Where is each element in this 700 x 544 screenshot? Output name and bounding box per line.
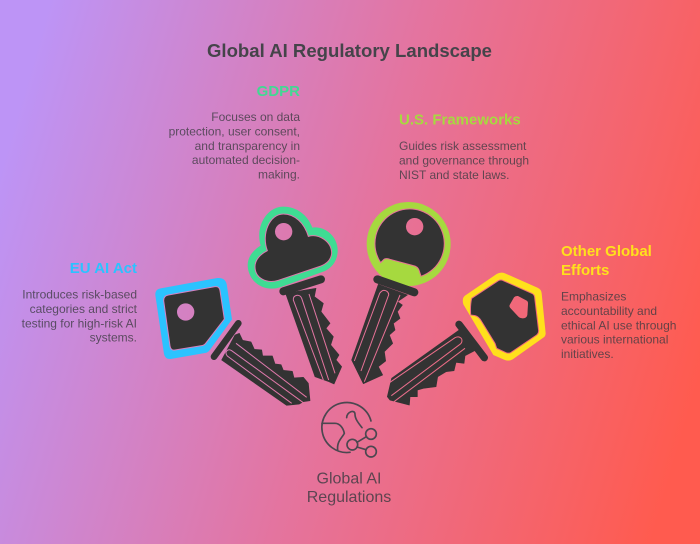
panel: U.S. Frameworks text — [399, 112, 529, 182]
label: Global AI Regulations: Regulations — [307, 489, 391, 506]
text block: U.S. Frameworks description: Guides risk assessment — [399, 139, 527, 153]
text block: Other Global Efforts description: ethical AI use through — [561, 318, 676, 332]
heading: Other Global Efforts: Efforts — [561, 262, 609, 279]
heading: GDPR: GDPR — [257, 83, 300, 100]
key: GDPR (green) — [248, 207, 342, 384]
text block: Other Global Efforts description: accountability and — [561, 304, 657, 318]
panel: EU AI Act text — [22, 260, 138, 344]
text block: U.S. Frameworks description: NIST and state laws. — [399, 168, 510, 182]
label: Global AI Regulations — [307, 470, 391, 506]
heading: Other Global Efforts — [561, 243, 652, 279]
key: Other Global Efforts (yellow) — [387, 273, 546, 405]
text block: Other Global Efforts description — [561, 290, 676, 361]
heading: Other Global Efforts: Other Global — [561, 243, 652, 260]
label: Global AI Regulations: Global AI — [317, 470, 381, 488]
text block: Other Global Efforts description: various international — [561, 332, 668, 346]
heading: EU AI Act: EU AI Act — [70, 260, 137, 277]
text block: EU AI Act description: categories and strict — [30, 302, 138, 316]
text block: EU AI Act description: testing for high-risk AI — [22, 316, 137, 330]
title: Global AI Regulatory Landscape — [207, 40, 492, 61]
text block: U.S. Frameworks description: and governance through — [399, 154, 529, 168]
key: EU AI Act (blue) — [155, 278, 310, 405]
text block: Other Global Efforts description: initiatives. — [561, 347, 614, 361]
text block: GDPR description — [169, 110, 300, 182]
text block: GDPR description: protection, user consent, — [169, 124, 300, 138]
panel: GDPR text — [169, 83, 300, 182]
icon: globe with network — [322, 403, 376, 457]
text block: U.S. Frameworks description — [399, 139, 529, 182]
text block: EU AI Act description — [22, 288, 138, 344]
text block: EU AI Act description: systems. — [90, 330, 137, 344]
text block: GDPR description: automated decision- — [192, 153, 300, 167]
text block: GDPR description: Focuses on data — [211, 110, 300, 124]
text block: GDPR description: making. — [258, 168, 300, 182]
text block: GDPR description: and transparency in — [195, 139, 300, 153]
heading: U.S. Frameworks: U.S. Frameworks — [399, 112, 521, 128]
panel: Other Global Efforts text — [561, 243, 676, 361]
text block: EU AI Act description: Introduces risk-based — [22, 288, 137, 302]
key: U.S. Frameworks (lime) — [352, 202, 451, 384]
text block: Other Global Efforts description: Emphasizes — [561, 290, 626, 304]
